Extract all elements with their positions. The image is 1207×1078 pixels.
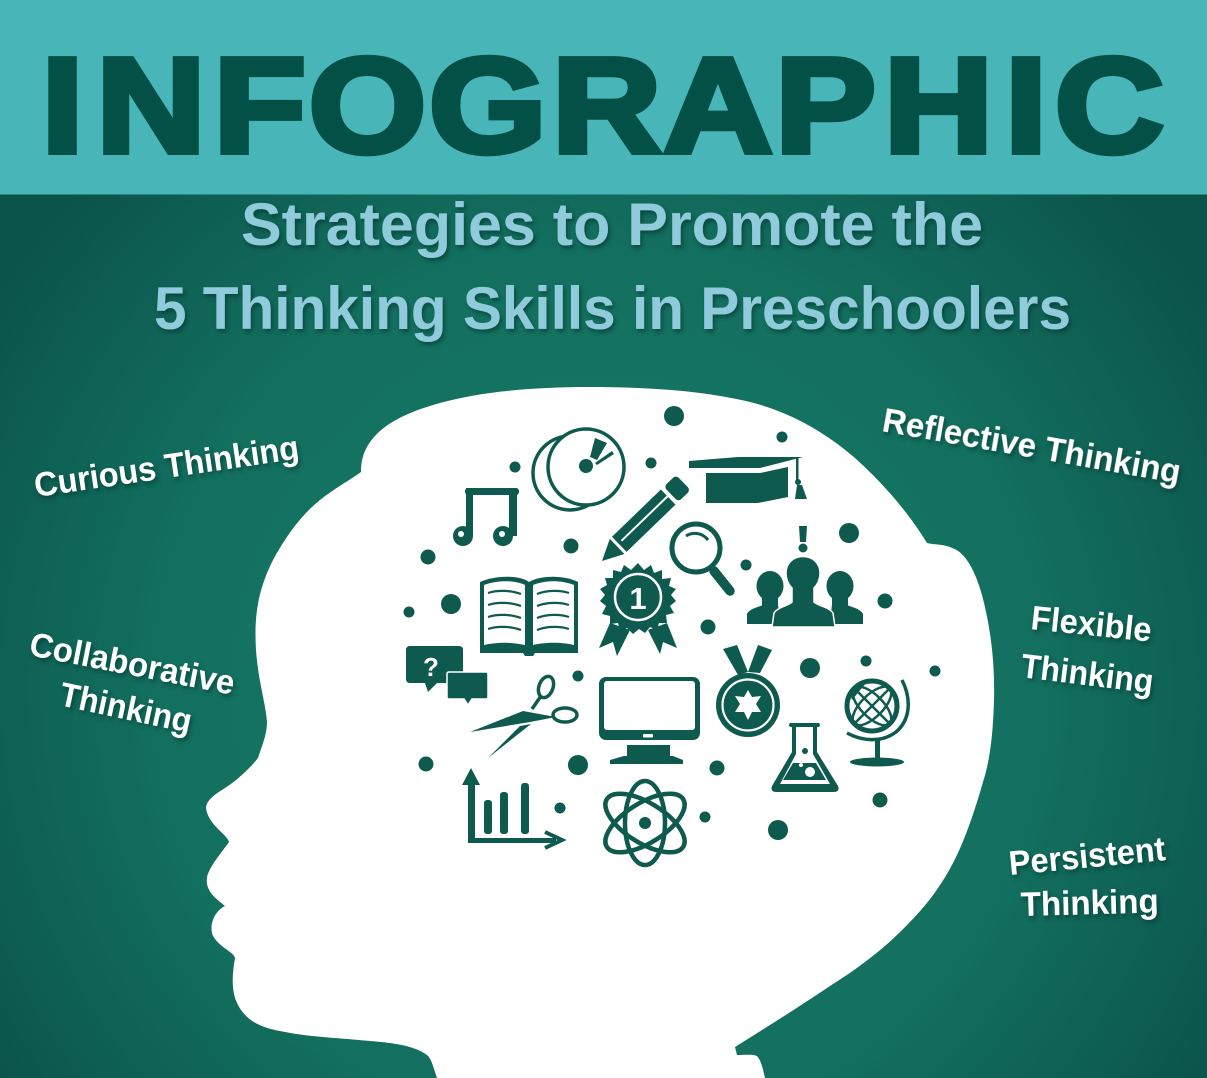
label: persistent thinking bbox=[1007, 830, 1167, 924]
icon: atom bbox=[596, 781, 694, 865]
head silhouette bbox=[206, 387, 994, 1078]
label: collaborative thinking: Collaborative bbox=[26, 626, 238, 703]
icon: globe bbox=[847, 680, 908, 766]
icon: compact discs bbox=[533, 429, 624, 510]
title band bbox=[0, 0, 1207, 194]
icon: magnifying glass bbox=[672, 524, 730, 591]
label: persistent thinking: Persistent bbox=[1007, 830, 1167, 883]
icon: chemistry flask bbox=[772, 723, 838, 792]
label: persistent thinking: Thinking bbox=[1020, 882, 1159, 924]
label: flexible thinking: Flexible bbox=[1029, 599, 1153, 650]
icons cluster bbox=[404, 406, 940, 865]
labels bbox=[26, 401, 1184, 924]
label: flexible thinking: Thinking bbox=[1019, 647, 1156, 701]
icon: computer monitor bbox=[599, 677, 700, 764]
label: collaborative thinking bbox=[26, 626, 238, 741]
icon: graduation cap bbox=[689, 457, 807, 503]
subtitle: 5 Thinking Skills in Preschoolers bbox=[154, 275, 1071, 342]
icon: speech bubbles with question mark: ? bbox=[423, 652, 439, 682]
icon: military medal with star bbox=[716, 645, 780, 737]
decorative dots bbox=[404, 406, 940, 840]
label: reflective thinking: Reflective Thinking bbox=[880, 401, 1184, 491]
icon: scissors bbox=[470, 674, 577, 758]
subtitle: Strategies to Promote the bbox=[241, 191, 983, 258]
subtitle bbox=[154, 191, 1071, 342]
icon: first place rosette: 1 bbox=[629, 581, 647, 616]
icon: group of people with exclamation bbox=[747, 526, 863, 627]
icon: bar chart with axes bbox=[462, 768, 562, 848]
title: INFOGRAPHIC bbox=[42, 30, 1164, 181]
label: curious thinking: Curious Thinking bbox=[32, 429, 301, 505]
icon: pencil bbox=[595, 475, 691, 569]
icon: music notes bbox=[453, 488, 519, 546]
icon: open book bbox=[480, 577, 578, 656]
icon: first place rosette bbox=[599, 563, 677, 656]
label: flexible thinking bbox=[1019, 599, 1156, 701]
icon: speech bubbles with question mark bbox=[406, 646, 488, 705]
label: collaborative thinking: Thinking bbox=[56, 676, 195, 741]
